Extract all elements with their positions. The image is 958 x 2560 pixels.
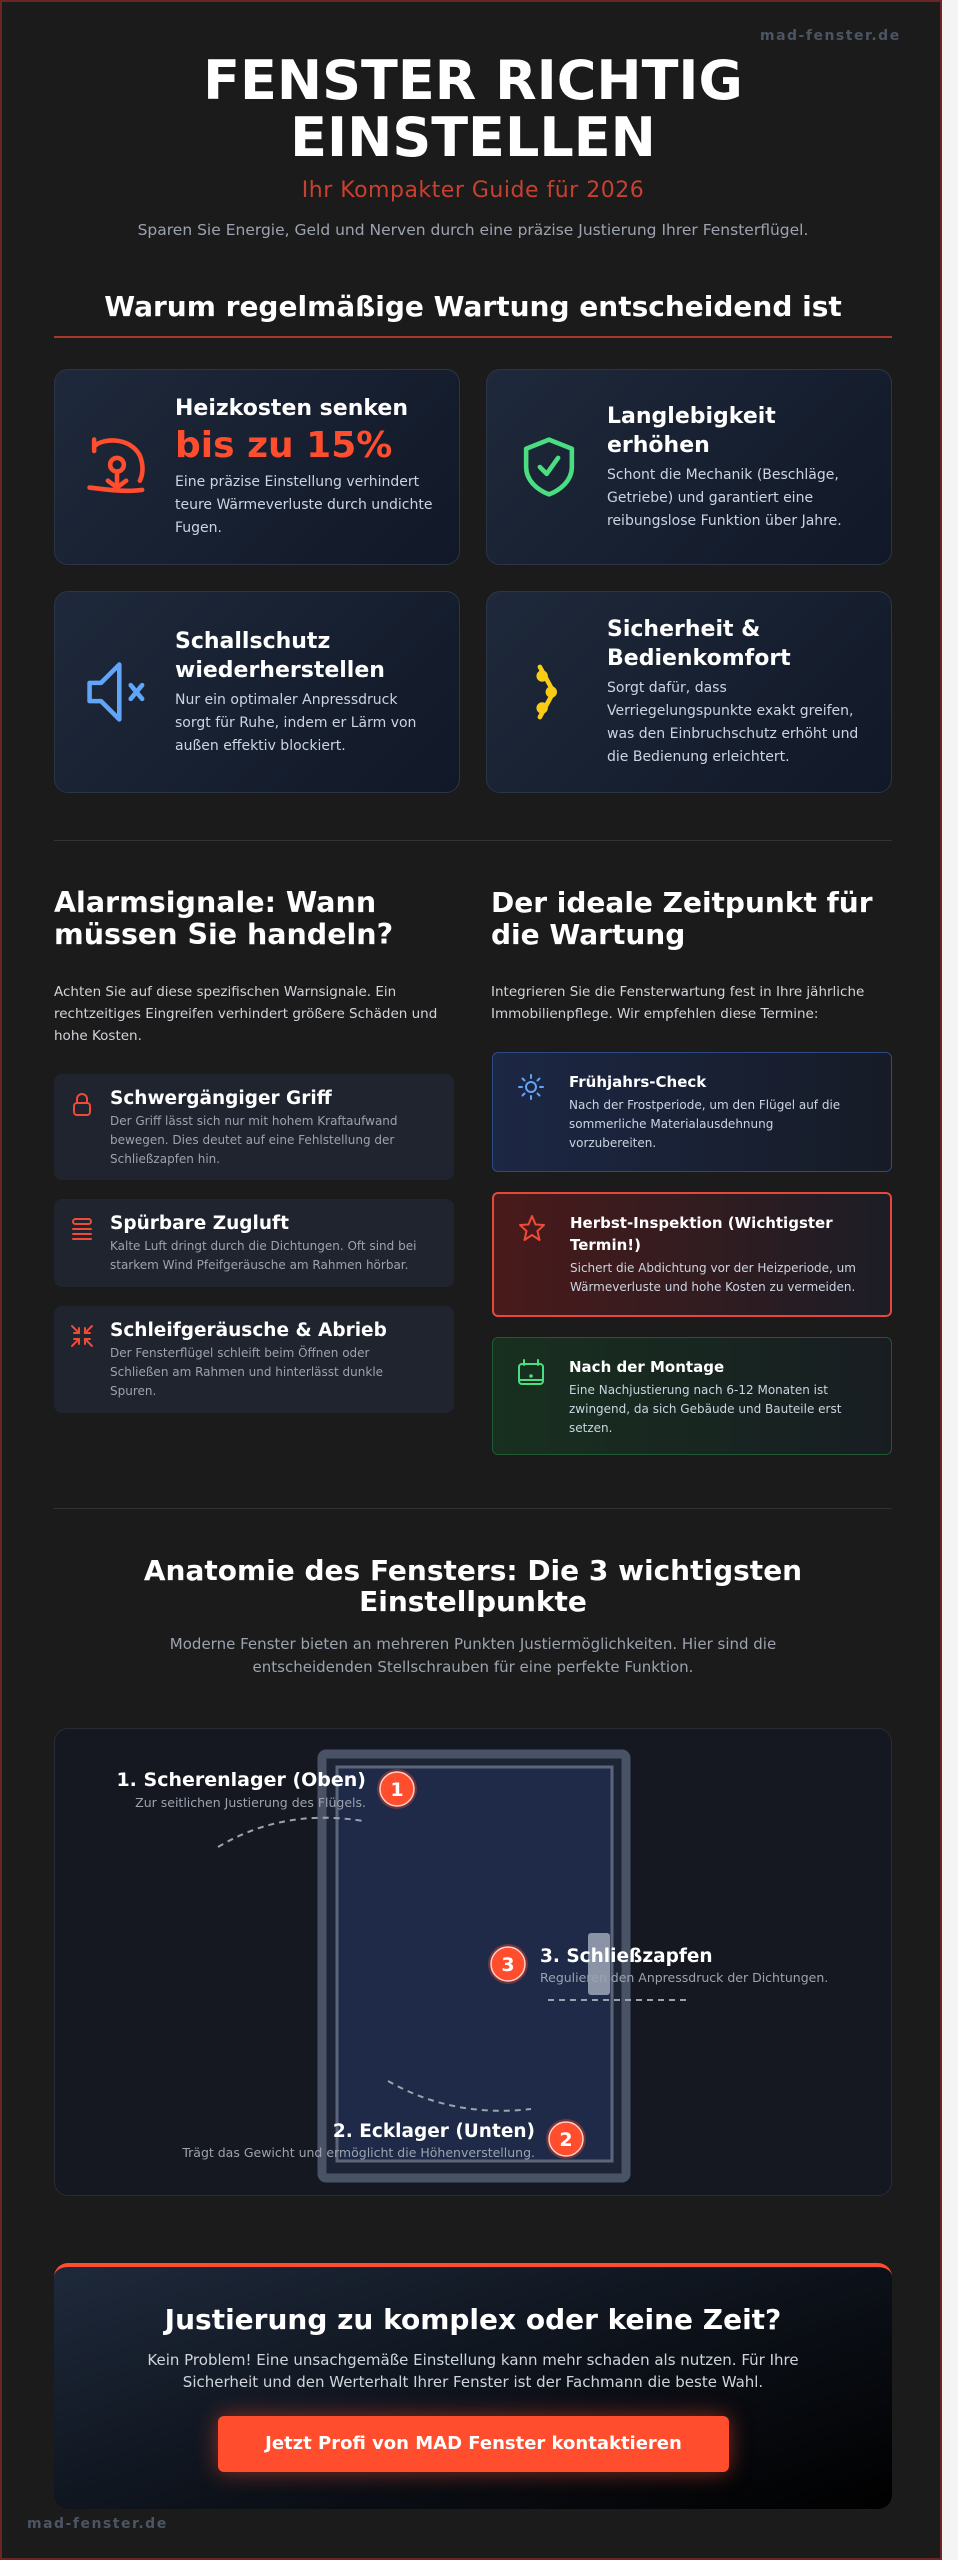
card: Schallschutz: Nur ein optimaler Anpressdruck sorgt für Ruhe, indem er Lärm von außen effektiv blockiert. [175, 692, 416, 754]
heading: Anatomie: Einstellpunkte [359, 1585, 587, 1618]
card: Heizkosten: Eine präzise Einstellung verhindert teure Wärmeverluste durch undichte Fugen. [175, 474, 432, 536]
icon: calendar [518, 1359, 544, 1385]
card: Sicherheit: Sicherheit & [607, 617, 760, 642]
CTA text: Kein Problem! Eine unsachgemäße Einstellung kann mehr schaden als nutzen. Für Ihre Sicherheit und den Werterhalt Ihrer Fenster ist der Fachmann die beste Wahl. [147, 2351, 799, 2391]
badge 3 [488, 1944, 528, 1984]
icon: heat [87, 437, 145, 494]
window frame [322, 1754, 626, 2178]
icon: speaker mute [87, 662, 144, 722]
badge 1: 1 [390, 1779, 404, 1801]
dashed arc top [218, 1818, 363, 1847]
icon: lock points [536, 664, 557, 720]
heading: Alarmsignale: müssen Sie handeln? [54, 918, 393, 951]
intro: Alarmsignale: Achten Sie auf diese spezifischen Warnsignale. Ein rechtzeitiges Eingreifen verhindert größere Schäden und hohe Kosten. [54, 984, 437, 1044]
watermark bottom: mad-fenster.de [27, 2516, 168, 2532]
badge 1 [377, 1769, 417, 1809]
schedule: Montage: Nach der Montage [569, 1358, 724, 1376]
diagram panel [54, 1728, 892, 2196]
label 1 [116, 1769, 366, 1810]
label 1: Zur seitlichen Justierung des Flügels. [135, 1795, 366, 1810]
card: Schallschutz: wiederherstellen [175, 658, 385, 682]
subtitle: Ihr Kompakter Guide für 2026 [302, 178, 644, 203]
card: Langlebigkeit: erhöhen [607, 432, 710, 458]
handle: Schließzapfen [588, 1933, 610, 1995]
card: Heizkosten: Heizkosten senken [175, 396, 408, 421]
badge 3: 3 [501, 1954, 515, 1976]
dashed arc bottom [388, 2081, 531, 2111]
label 3: Regulieren den Anpressdruck der Dichtungen. [540, 1970, 828, 1985]
card: Schallschutz: Schallschutz [175, 628, 330, 654]
alarm: Schleifgeräusche: Schleifgeräusche & Abrieb [110, 1320, 387, 1341]
CTA button [218, 2416, 729, 2472]
alarm: Schleifgeräusche [54, 1306, 454, 1413]
heading: Alarmsignale [54, 886, 393, 951]
alarm: Zugluft [54, 1199, 454, 1287]
schedule: Herbst [492, 1192, 892, 1317]
title [203, 49, 743, 169]
label 2: Trägt das Gewicht und ermöglicht die Höhenverstellung. [181, 2145, 535, 2160]
title: EINSTELLEN [290, 106, 656, 169]
title: FENSTER RICHTIG [203, 49, 743, 112]
intro: Zeitpunkt: Integrieren Sie die Fensterwartung fest in Ihre jährliche Immobilienpflege. Wir empfehlen diese Termine: [491, 984, 864, 1022]
icon: shield [524, 437, 574, 497]
heading: Anatomie: Anatomie des Fensters: Die 3 wichtigsten [144, 1554, 802, 1587]
label 3 [540, 1946, 828, 1985]
alarm: Zugluft: Kalte Luft dringt durch die Dichtungen. Oft sind bei starkem Wind Pfeifgeräusche am Rahmen hörbar. [110, 1239, 416, 1272]
heading: Zeitpunkt: die Wartung [491, 918, 685, 951]
heading: Warum: Warum regelmäßige Wartung entscheidend ist [104, 290, 842, 323]
card: Sicherheit: Bedienkomfort [607, 646, 791, 671]
heading: Zeitpunkt [491, 886, 873, 951]
icon: lock [73, 1093, 91, 1116]
card: Heizkosten: bis zu 15% [175, 425, 392, 466]
card: Sicherheit [486, 591, 892, 793]
icon: sun [518, 1074, 544, 1100]
schedule: Herbst: Herbst-Inspektion (Wichtigster Termin!) [570, 1214, 833, 1254]
alarm: Schleifgeräusche: Der Fensterflügel schleift beim Öffnen oder Schließen am Rahmen und hinterlässt dunkle Spuren. [110, 1346, 383, 1398]
card: Schallschutz [54, 591, 460, 793]
intro: Anatomie: Moderne Fenster bieten an mehreren Punkten Justiermöglichkeiten. Hier sind die entscheidenden Stellschrauben für eine perfekte Funktion. [170, 1635, 776, 1676]
badge 2 [546, 2119, 586, 2159]
card: Heizkosten [54, 369, 460, 565]
alarm: Griff: Der Griff lässt sich nur mit hohem Kraftaufwand bewegen. Dies deutet auf eine Fehlstellung der Schließzapfen hin. [110, 1114, 398, 1166]
label 2: 2. Ecklager (Unten) [333, 2121, 535, 2142]
schedule: Herbst: Sichert die Abdichtung vor der Heizperiode, um Wärmeverluste und hohe Kosten zu vermeiden. [570, 1261, 856, 1294]
CTA heading: Justierung zu komplex oder keine Zeit? [165, 2303, 781, 2336]
tagline: Sparen Sie Energie, Geld und Nerven durch eine präzise Justierung Ihrer Fensterflügel. [138, 221, 808, 239]
CTA panel [54, 2263, 892, 2509]
label 3: 3. Schließzapfen [540, 1946, 713, 1967]
watermark top: mad-fenster.de [760, 28, 901, 44]
card: Langlebigkeit [486, 369, 892, 565]
heading: Anatomie [144, 1554, 802, 1618]
icon: star [519, 1215, 545, 1241]
label 2 [181, 2121, 535, 2160]
icon: lines [72, 1218, 92, 1240]
card: Langlebigkeit: Schont die Mechanik (Beschläge, Getriebe) und garantiert eine reibungslose Funktion über Jahre. [607, 466, 842, 528]
icon: arrows in [71, 1325, 93, 1347]
alarm: Zugluft: Spürbare Zugluft [110, 1213, 289, 1234]
CTA button: Jetzt Profi von MAD Fenster kontaktieren [265, 2433, 682, 2454]
card: Sicherheit: Sorgt dafür, dass Verriegelungspunkte exakt greifen, was den Einbruchschutz erhöht und die Bedienung erleichtert. [607, 680, 858, 765]
label 1: 1. Scherenlager (Oben) [116, 1769, 366, 1791]
schedule: Frühjahr: Frühjahrs-Check [569, 1073, 706, 1091]
alarm: Griff [54, 1074, 454, 1180]
heading: Alarmsignale: Alarmsignale: Wann [54, 886, 376, 919]
card: Langlebigkeit: Langlebigkeit [607, 404, 776, 428]
schedule: Montage: Eine Nachjustierung nach 6-12 Monaten ist zwingend, da sich Gebäude und Bauteile erst setzen. [569, 1383, 841, 1435]
schedule: Frühjahr: Nach der Frostperiode, um den Flügel auf die sommerliche Materialausdehnung vorzubereiten. [569, 1098, 840, 1150]
heading: Zeitpunkt: Der ideale Zeitpunkt für [491, 886, 873, 919]
badge 2: 2 [559, 2129, 573, 2151]
schedule: Frühjahr [492, 1052, 892, 1172]
alarm: Griff: Schwergängiger Griff [110, 1088, 332, 1109]
dashed line right [548, 1999, 687, 2001]
schedule: Montage [492, 1337, 892, 1455]
